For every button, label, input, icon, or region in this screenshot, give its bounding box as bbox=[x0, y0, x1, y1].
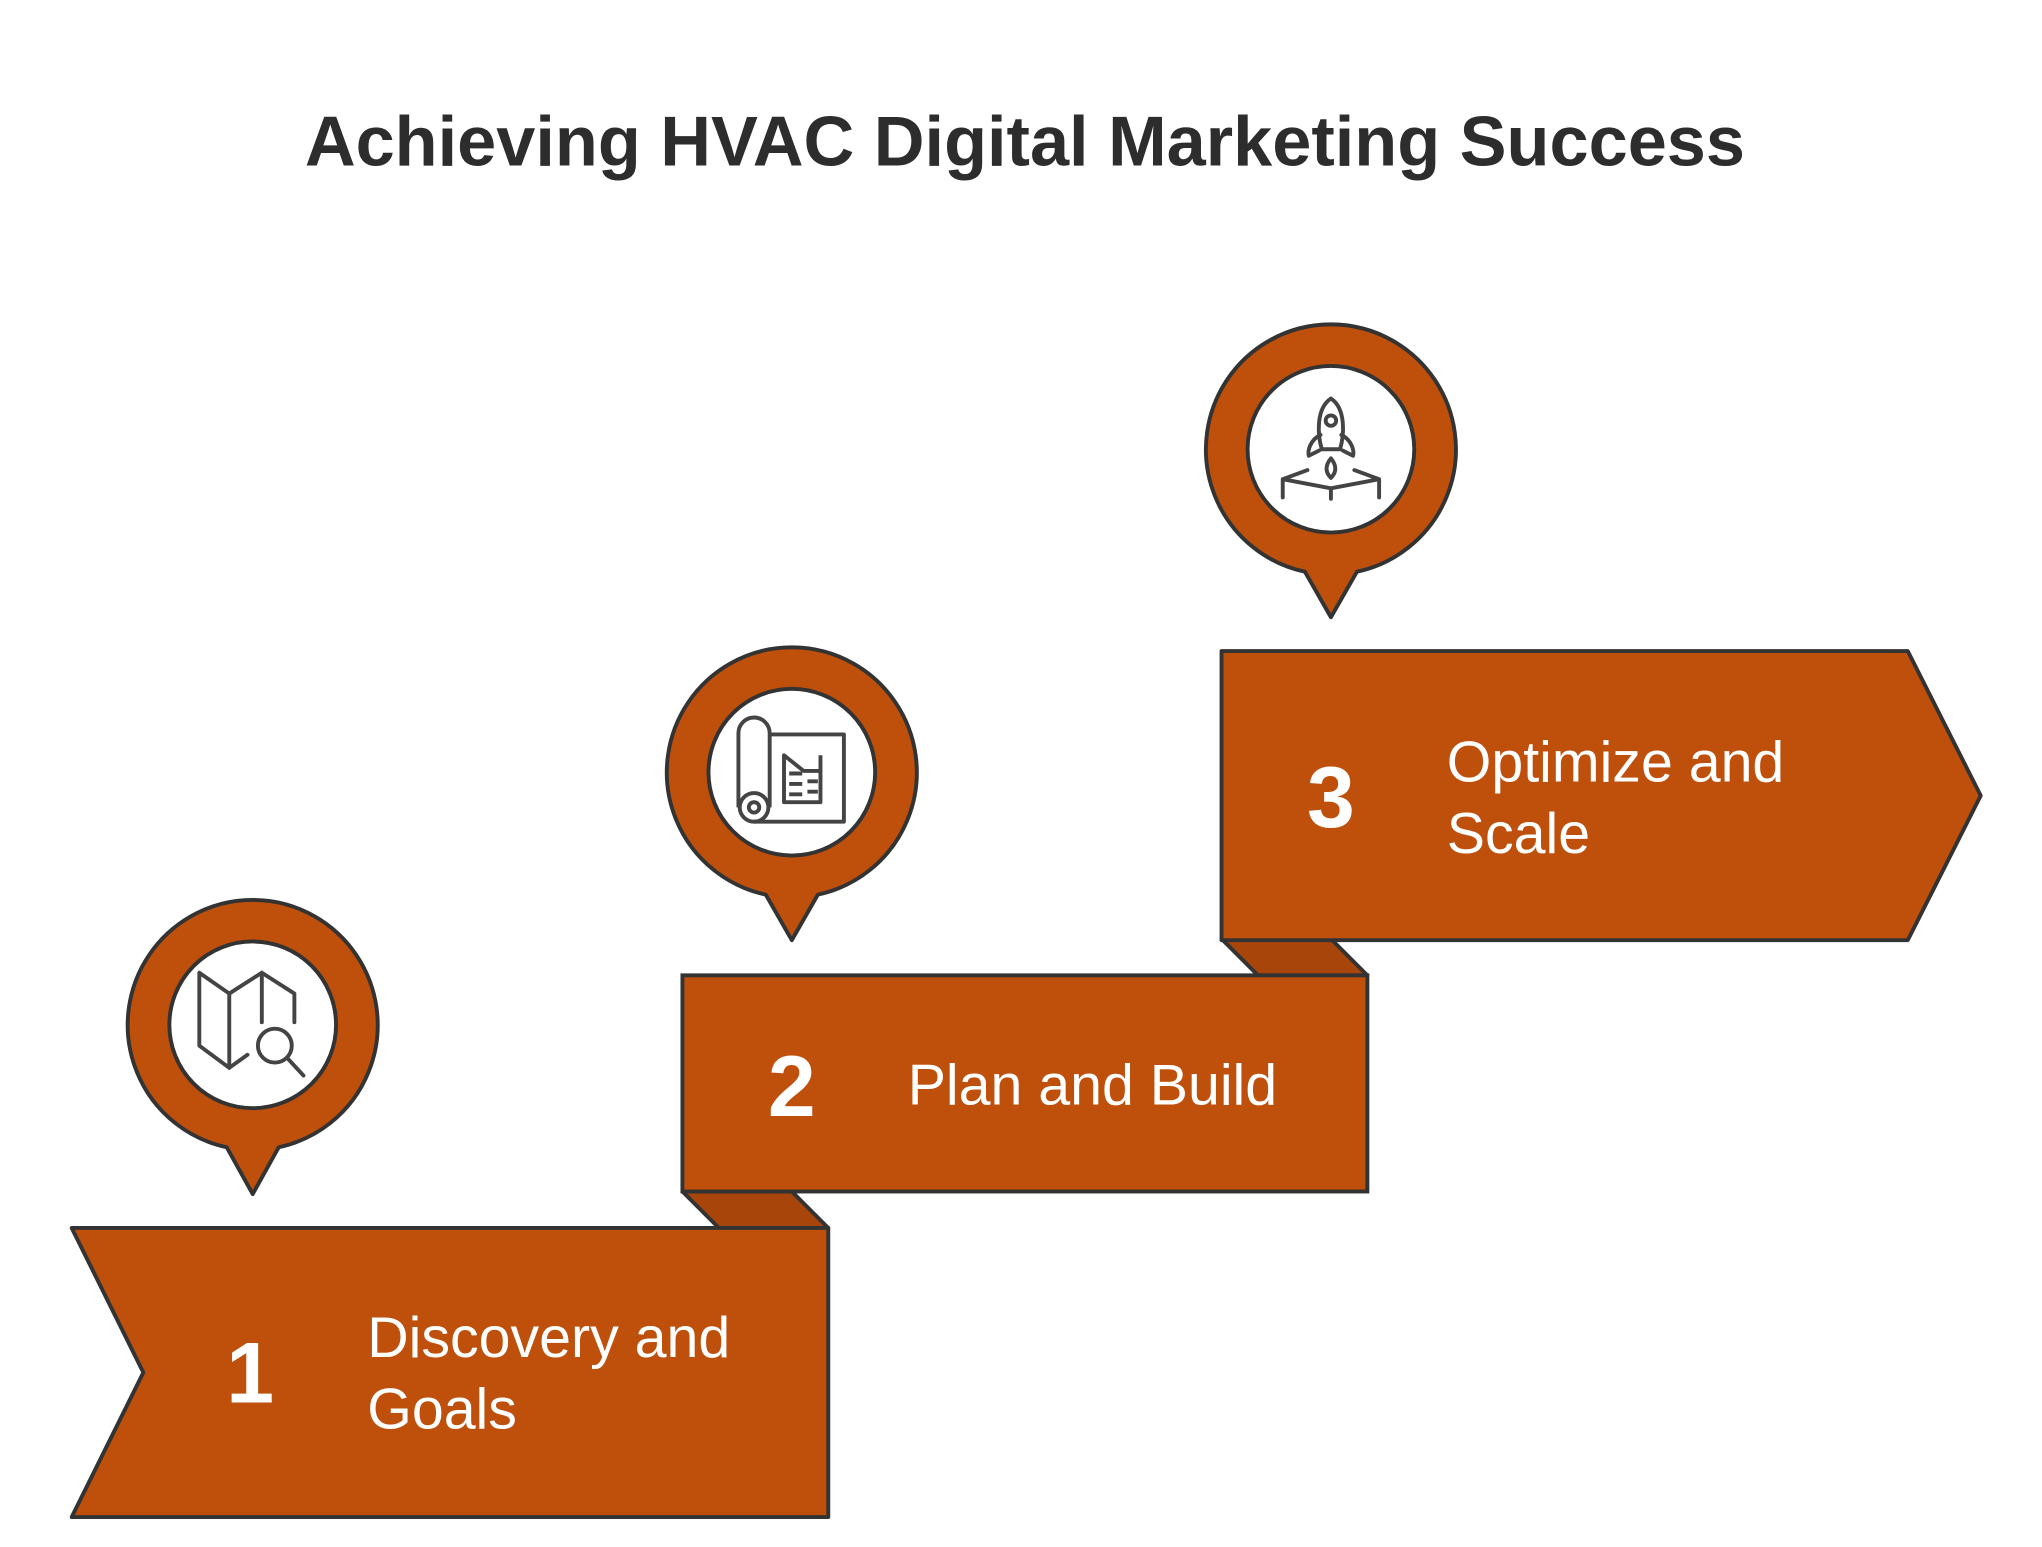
label 1: Goals bbox=[367, 1378, 517, 1442]
label 3: Optimize and bbox=[1447, 730, 1784, 794]
number 1: 1 bbox=[226, 1325, 274, 1421]
step 2 banner bbox=[682, 939, 1367, 1192]
fold connector 1-2 bbox=[682, 1192, 828, 1228]
title: Achieving HVAC Digital Marketing Success bbox=[305, 101, 1745, 180]
label 2: Plan and Build bbox=[908, 1053, 1277, 1117]
pin 2: blueprint icon bbox=[667, 647, 917, 940]
number 3: 3 bbox=[1307, 750, 1355, 846]
label 1: Discovery and bbox=[367, 1306, 730, 1370]
step 3 banner bbox=[1222, 651, 1981, 940]
step 1 banner bbox=[72, 1192, 828, 1517]
pin 3: rocket launch icon bbox=[1206, 324, 1456, 617]
pin 1: map search icon bbox=[128, 900, 378, 1194]
label 3: Scale bbox=[1447, 802, 1590, 866]
number 2: 2 bbox=[768, 1039, 816, 1135]
fold connector 2-3 bbox=[1222, 939, 1367, 975]
